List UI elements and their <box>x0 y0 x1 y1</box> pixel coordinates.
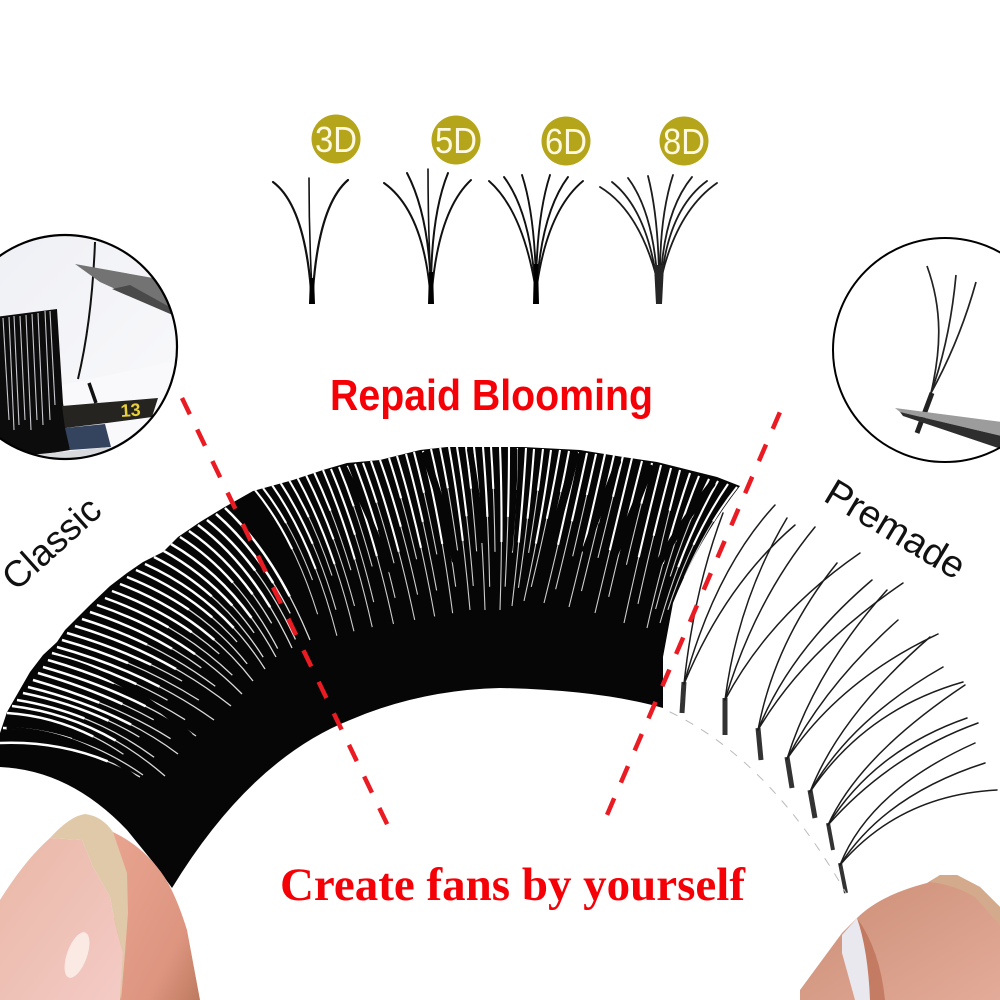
finger skin <box>800 875 1000 1000</box>
fan 7 <box>840 743 997 893</box>
dashed guide: left <box>182 398 388 826</box>
photo: blue ribbon tab <box>65 424 111 450</box>
lash strip guide <box>670 712 846 893</box>
black lash clumps <box>8 450 712 790</box>
fan 5 <box>810 637 963 818</box>
caption: Create fans by yourself: Create fans by yourself <box>280 859 746 911</box>
photo: lash root <box>89 383 96 403</box>
icon: 6D fan <box>489 175 583 304</box>
fan 1 <box>682 505 795 713</box>
nail <box>0 838 123 1000</box>
photo: lash strip <box>0 309 70 470</box>
dashed guide: right <box>607 405 783 815</box>
label: Premade: Premade <box>817 472 973 588</box>
photo: length label: 13 <box>120 400 141 421</box>
fan 6 <box>828 685 978 850</box>
photo: premade fan <box>917 266 976 433</box>
classic lash gaps: long <box>0 508 310 783</box>
photo: white lash gaps <box>3 311 55 430</box>
fan 4 <box>787 590 938 788</box>
premade lash fans <box>670 505 997 893</box>
icon: 3D fan <box>273 178 348 304</box>
icon: 5D fan <box>384 169 471 304</box>
photo: tweezers <box>75 264 175 316</box>
badge: 6D: 6D <box>545 121 587 162</box>
badge: 3D: 3D <box>315 119 357 160</box>
finger shadow <box>857 918 885 1000</box>
centre lash gaps: tips <box>254 447 738 570</box>
photo: tweezers <box>895 408 1000 452</box>
white tape <box>842 918 870 1000</box>
badge: 8D: 8D <box>663 121 705 162</box>
photo: single lash <box>78 242 95 379</box>
finger pad <box>113 832 200 1000</box>
right finger <box>800 875 1000 1000</box>
photo: ribbon <box>62 398 158 428</box>
left finger <box>0 814 200 1000</box>
photo: white card <box>60 360 180 470</box>
fan 3 <box>758 563 903 760</box>
heading: Repaid Blooming: Repaid Blooming <box>330 371 653 420</box>
panel: premade fan photo circle <box>833 238 1000 462</box>
lash band photo <box>0 447 740 888</box>
nail free edge <box>50 814 128 1000</box>
badge: 5D: 5D <box>435 120 477 161</box>
classic lash gaps: tips <box>0 507 291 762</box>
fan 2 <box>725 518 860 735</box>
panel: classic lash photo circle <box>0 235 180 470</box>
nail glare <box>59 929 95 981</box>
icon: 8D fan <box>600 175 717 304</box>
photo: ribbon bottom card <box>36 447 110 458</box>
fingernail <box>930 875 1000 925</box>
centre lash gaps: long <box>255 447 737 640</box>
